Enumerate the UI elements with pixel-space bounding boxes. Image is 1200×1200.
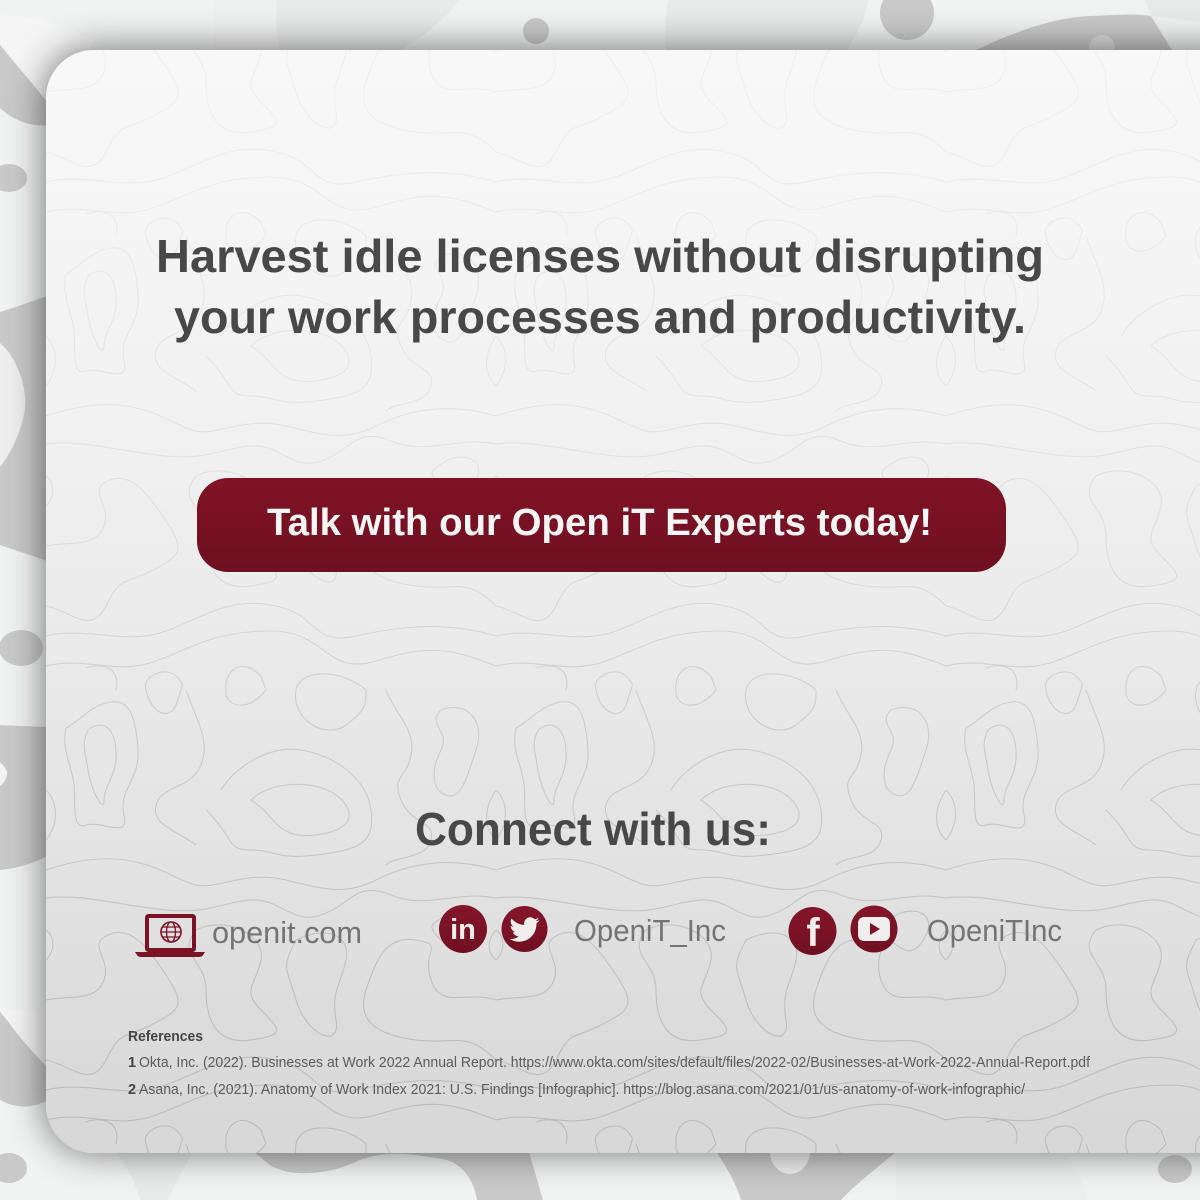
icon: linkedin: in <box>450 914 476 946</box>
icon: laptop with globe <box>135 916 205 957</box>
reference 2: 2 <box>128 1082 136 1098</box>
reference 1: 1 <box>128 1055 136 1071</box>
icon: twitter <box>502 906 548 952</box>
heading: Harvest idle licenses without disrupting <box>156 230 1044 282</box>
heading <box>156 230 1044 343</box>
references heading: References <box>128 1029 203 1045</box>
references <box>128 1029 1091 1098</box>
reference 2: Asana, Inc. (2021). Anatomy of Work Index 2021: U.S. Findings [Infographic]. https://blog.asana.com/2021/01/us-anatomy-of-work-infographic/ <box>139 1082 1026 1098</box>
call-to-action button: Talk with our Open iT Experts today! <box>267 502 932 544</box>
linkedin and twitter handle <box>439 905 726 953</box>
twitter handle: OpeniT_Inc <box>574 913 726 948</box>
facebook and youtube handle <box>788 906 1062 955</box>
icon: facebook <box>788 907 836 955</box>
heading: your work processes and productivity. <box>174 291 1026 343</box>
reference 1: Okta, Inc. (2022). Businesses at Work 2022 Annual Report. https://www.okta.com/sites/default/files/2022-02/Businesses-at-Work-2022-Annual-Report.pdf <box>139 1055 1091 1071</box>
website link <box>135 915 362 957</box>
connect heading: Connect with us: <box>415 803 771 855</box>
call-to-action button <box>197 478 1006 572</box>
icon: youtube <box>850 906 898 952</box>
icon: linkedin <box>439 905 487 953</box>
youtube handle: OpeniTInc <box>927 913 1062 948</box>
icon: facebook: f <box>806 911 820 955</box>
website text: openit.com <box>212 915 362 950</box>
